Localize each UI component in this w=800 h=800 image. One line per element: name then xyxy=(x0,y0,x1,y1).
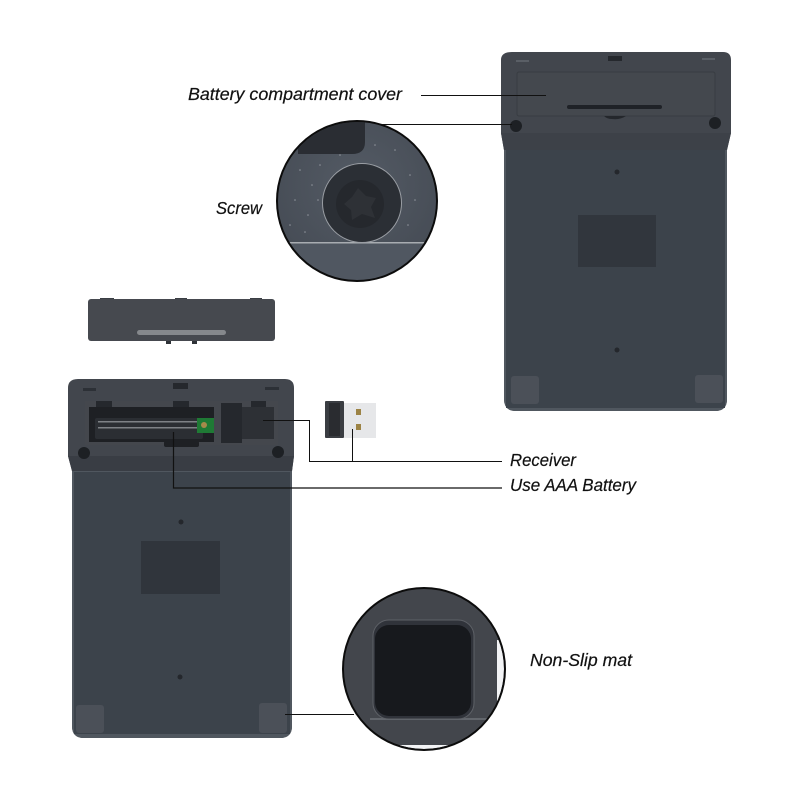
callout: screw magnified xyxy=(277,121,438,283)
label: non-slip mat: Non-Slip mat xyxy=(530,650,633,670)
label: receiver: Receiver xyxy=(510,450,577,470)
screws xyxy=(510,117,721,132)
label: battery compartment cover: Battery compartment cover xyxy=(188,84,403,104)
device: keyboard back with cover closed xyxy=(501,52,731,411)
label: use AAA battery: Use AAA Battery xyxy=(510,475,637,495)
open battery compartment xyxy=(85,401,278,447)
receiver bay xyxy=(221,401,274,443)
leader lines xyxy=(174,96,546,714)
label: screw: Screw xyxy=(216,198,263,218)
battery compartment cover xyxy=(517,72,715,119)
device: keyboard back with cover open xyxy=(68,379,294,738)
icon: USB receiver xyxy=(325,401,376,438)
detached battery cover xyxy=(88,298,275,344)
callout: non-slip mat magnified xyxy=(343,588,507,751)
screws xyxy=(78,446,284,459)
